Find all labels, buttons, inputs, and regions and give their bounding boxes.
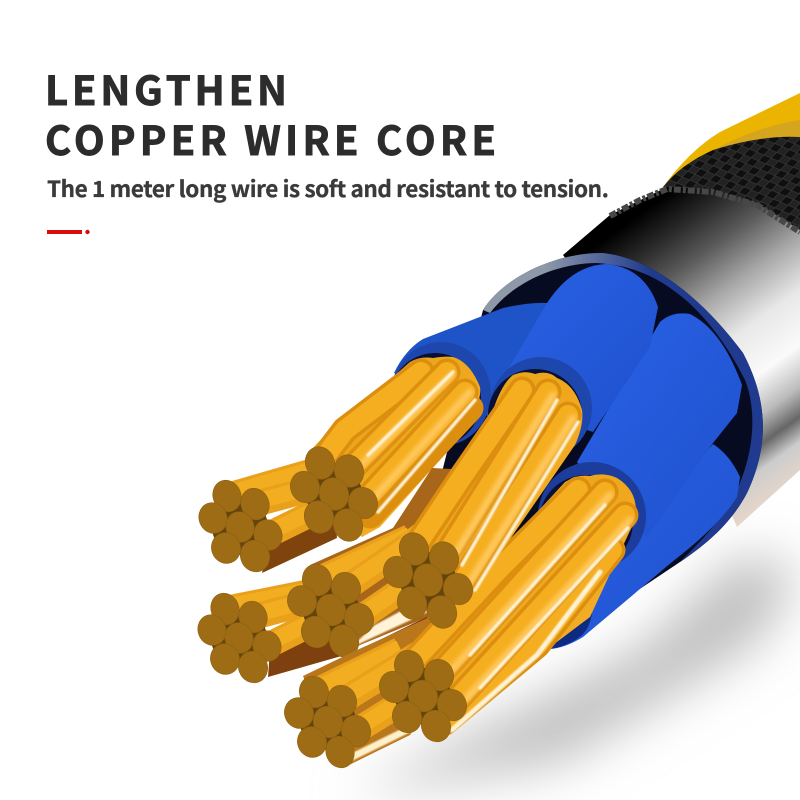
woven black braid: [663, 137, 800, 232]
copper strand bundle: far left lower: [194, 589, 345, 687]
tube 4 lower: [535, 444, 740, 649]
braid cut edge: [610, 189, 800, 232]
copper strand bundle: bottom left: [280, 617, 470, 772]
cable: outer jacket layers: [563, 93, 800, 527]
tube 1 left: [389, 303, 560, 447]
yellow outer jacket: [663, 93, 800, 187]
copper strand bundle: upper, from tube 1: [286, 357, 480, 545]
title: COPPER WIRE CORE: [45, 109, 496, 167]
blue insulated tubes: [389, 264, 742, 649]
copper strand bundle: far left upper: [195, 470, 337, 576]
tube 2 middle: [488, 264, 658, 461]
insulation ring rim: [483, 253, 763, 562]
red accent mark: [47, 230, 90, 234]
copper strand bundle: center: [283, 468, 470, 661]
insulation ring dark interior: [440, 253, 763, 649]
title: LENGTHEN: [45, 59, 287, 117]
subtitle: The 1 meter long wire is soft and resistant to tension.: [47, 172, 609, 204]
copper strand bundle: bottom right, from tube 3: [375, 474, 636, 746]
copper strand bundle: center right, from tube 2: [379, 372, 582, 632]
silver foil shield: [563, 187, 800, 527]
ground shadow under the cable: [350, 555, 800, 795]
title: [45, 59, 496, 167]
tube 3 right: [538, 313, 742, 570]
